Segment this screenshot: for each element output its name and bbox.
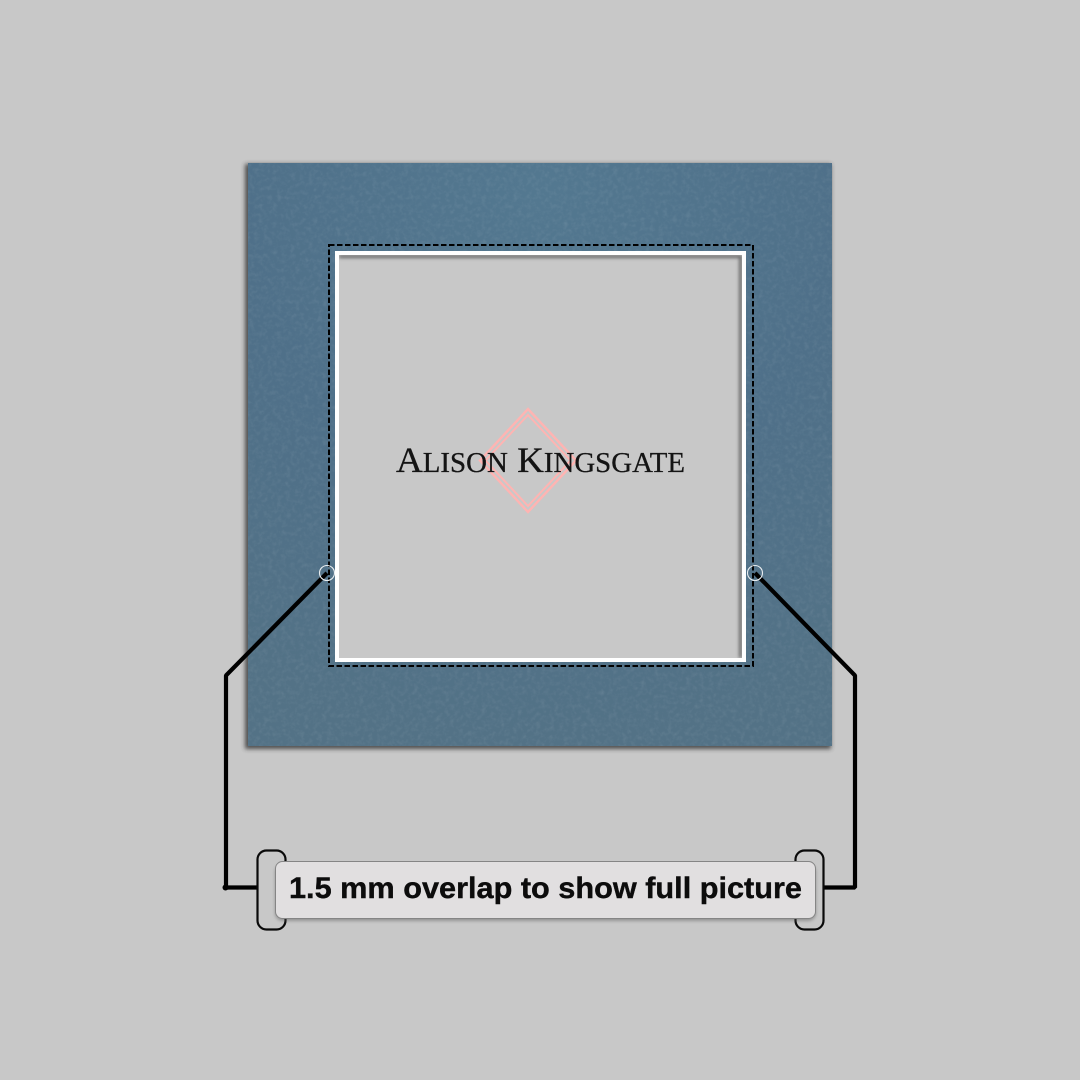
right bracket [796, 850, 824, 930]
logo: Alison Kingsgate [396, 409, 685, 512]
window inner shadow [339, 255, 742, 658]
right leader line [755, 573, 855, 888]
panel: blue mount board [245, 163, 832, 749]
left leader line [222, 573, 327, 890]
right marker circle [748, 566, 762, 580]
white window border [335, 251, 746, 662]
icon: pink diamond [480, 409, 576, 512]
left marker circle [320, 566, 334, 580]
logo text: ALISON KINGSGATE [396, 440, 685, 480]
callout label [275, 862, 816, 921]
left bracket [258, 850, 286, 930]
picture window opening [335, 251, 746, 662]
dashed overlap outline [329, 245, 753, 666]
callout text: 1.5 mm overlap to show full picture [289, 872, 802, 905]
